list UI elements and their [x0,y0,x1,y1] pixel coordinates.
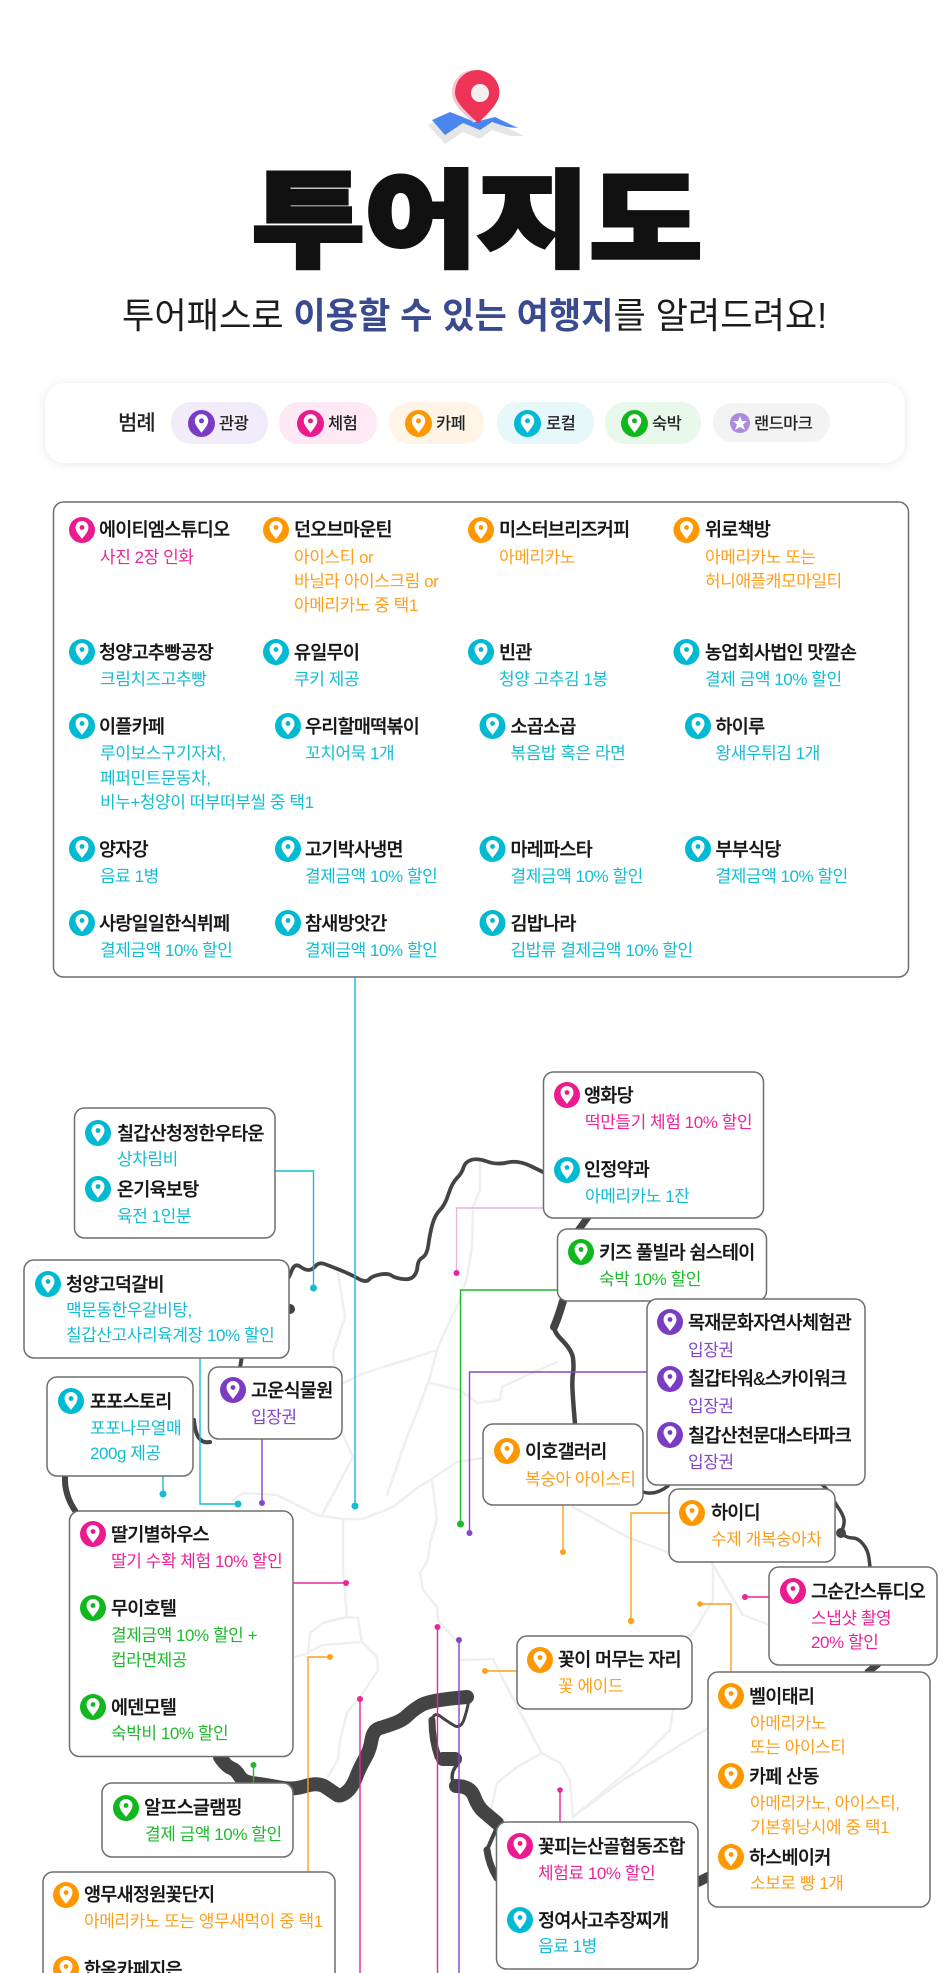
card: 벨이태리, 카페 산동, 하스베이커: 또는 아이스티 [750,1738,845,1757]
connector: 하단 체험 1 [357,1696,363,1973]
card: 칠갑산청정한우타운, 온기육보탕 [74,1108,275,1238]
card: 딸기별하우스, 무이호텔, 에덴모텔: 딸기 수확 체험 10% 할인 [111,1552,282,1571]
connector: 그순간스튜디오 [742,1594,769,1600]
card: 벨이태리, 카페 산동, 하스베이커: 카페 산동 [749,1766,819,1787]
item: 유일무이 [263,639,359,689]
connector: 벨이태리 [697,1601,731,1672]
item: 우리할매떡볶이 [275,713,419,763]
item: 소곱소곱: 볶음밥 혹은 라면 [510,744,625,763]
card: 꽃이 머무는 자리 [517,1636,692,1709]
connector: 꽃이 머무는 자리 [482,1668,517,1674]
item: 위로책방: 아메리카노 또는 [705,548,816,567]
card: 포포스토리 [47,1377,193,1476]
legend: 체험: 체험 [328,414,357,433]
connector: 이호갤러리 [560,1505,566,1555]
item: 빈관 [468,639,608,689]
card: 고운식물원: 고운식물원 [251,1380,333,1401]
item: 던오브마운틴: 아이스티 or [294,548,374,567]
item: 사랑일일한식뷔페: 결제금액 10% 할인 [100,941,232,960]
card: 벨이태리, 카페 산동, 하스베이커 [708,1672,930,1907]
item: 청양고추빵공장: 크림치즈고추빵 [100,670,207,689]
card: 칠갑산청정한우타운, 온기육보탕: 칠갑산청정한우타운 [117,1123,264,1144]
connector: 하단 관광 [456,1637,462,1973]
connector: 꽃피는산골 [557,1787,563,1822]
card: 딸기별하우스, 무이호텔, 에덴모텔: 컵라면제공 [111,1651,187,1670]
legend heading: 범례 [118,412,155,435]
item: 부부식당: 결제금액 10% 할인 [716,867,848,886]
item: 농업회사법인 맛깔손: 농업회사법인 맛깔손 [705,642,857,663]
item: 김밥나라: 김밥류 결제금액 10% 할인 [510,941,693,960]
card: 목재문화자연사체험관, 칠갑타워&스카이워크, 칠갑산천문대스타파크: 목재문화자연사체험관 [688,1312,852,1333]
card: 벨이태리, 카페 산동, 하스베이커: 기본휘낭시에 중 택1 [750,1818,889,1837]
legend: 관광 [171,402,268,444]
item: 위로책방 [674,517,842,591]
card: 키즈 풀빌라 쉼스테이: 키즈 풀빌라 쉼스테이 [599,1242,755,1263]
item: 소곱소곱: 소곱소곱 [510,716,576,737]
item: 우리할매떡볶이: 우리할매떡볶이 [305,716,419,737]
icon: map pin logo [428,70,524,144]
card: 알프스글램핑: 결제 금액 10% 할인 [145,1825,282,1844]
item: 농업회사법인 맛깔손 [674,639,857,689]
item: 미스터브리즈커피 [468,517,629,567]
item: 김밥나라 [480,910,693,960]
item: 마레파스타: 결제금액 10% 할인 [510,867,643,886]
card: 벨이태리, 카페 산동, 하스베이커: 벨이태리 [749,1686,814,1707]
legend: 관광: 관광 [219,414,249,433]
card: 꽃피는산골협동조합, 정여사고추장찌개: 꽃피는산골협동조합 [538,1836,685,1857]
legend: 카페 [389,402,484,444]
item: 미스터브리즈커피: 아메리카노 [499,548,575,567]
connector: 딸기별하우스 [293,1580,349,1586]
title: 투어지도 [252,164,702,281]
connector: 고운식물원 [259,1439,265,1506]
card: 앵화당, 인정약과 [544,1072,764,1218]
item: 하이루: 왕새우튀김 1개 [716,744,820,763]
card: 키즈 풀빌라 쉼스테이: 숙박 10% 할인 [599,1270,701,1289]
item: 마레파스타: 마레파스타 [510,839,593,860]
card: 꽃피는산골협동조합, 정여사고추장찌개 [496,1822,698,1969]
card: 꽃피는산골협동조합, 정여사고추장찌개: 체험료 10% 할인 [538,1864,655,1883]
item: 부부식당 [685,836,848,886]
connector: 투어 목록 [352,977,358,1510]
card: 하이디: 하이디 [711,1502,760,1523]
connector: 알프스글램핑 [250,1762,256,1783]
card: 앵화당, 인정약과: 인정약과 [584,1159,650,1180]
card: 딸기별하우스, 무이호텔, 에덴모텔 [70,1511,293,1756]
card: 알프스글램핑 [102,1783,293,1857]
card: 딸기별하우스, 무이호텔, 에덴모텔: 무이호텔 [111,1598,176,1619]
card: 포포스토리: 포포나무열매 [90,1419,181,1438]
card: 청양고덕갈비: 맥문동한우갈비탕, [66,1301,192,1320]
connector: 청양고덕갈비 [200,1358,242,1508]
item: 에이티엠스튜디오: 에이티엠스튜디오 [99,519,230,540]
card: 키즈 풀빌라 쉼스테이 [558,1229,766,1301]
item: 고기박사냉면 [275,836,437,886]
card: 이호갤러리 [483,1424,643,1505]
item: 고기박사냉면: 고기박사냉면 [305,839,403,860]
item: 하이루 [685,713,820,763]
item: 참새방앗간: 참새방앗간 [305,913,387,934]
card: 그순간스튜디오 [769,1567,937,1665]
card: 딸기별하우스, 무이호텔, 에덴모텔: 딸기별하우스 [111,1524,210,1545]
item: 에이티엠스튜디오 [69,517,230,567]
item: 이플카페 [69,713,314,812]
item: 청양고추빵공장 [69,639,214,689]
card: 벨이태리, 카페 산동, 하스베이커: 아메리카노, 아이스티, [750,1794,900,1813]
map: major roads [65,1159,878,1882]
card: 하이디: 수제 개복숭아차 [711,1530,822,1549]
card: 꽃이 머무는 자리: 꽃이 머무는 자리 [558,1649,681,1670]
card: 이호갤러리: 복숭아 아이스티 [525,1470,636,1489]
item: 참새방앗간 [275,910,437,960]
card: 목재문화자연사체험관, 칠갑타워&스카이워크, 칠갑산천문대스타파크: 입장권 [688,1341,734,1360]
connector: 칠갑산 [275,1171,317,1292]
item: 이플카페: 비누+청양이 떠부떠부씰 중 택1 [100,793,314,812]
card: 앵화당, 인정약과: 떡만들기 체험 10% 할인 [585,1113,752,1132]
card: 포포스토리: 200g 제공 [90,1444,161,1463]
legend: 로컬: 로컬 [546,414,575,433]
item: 이플카페: 이플카페 [99,716,164,737]
connector: 포포스토리 [160,1476,166,1498]
item: 김밥나라: 김밥나라 [510,913,576,934]
item: 마레파스타 [480,836,643,886]
item: 유일무이: 유일무이 [294,642,359,663]
card: 청양고덕갈비 [24,1260,289,1358]
card: 칠갑산청정한우타운, 온기육보탕: 육전 1인분 [117,1207,191,1226]
card: 딸기별하우스, 무이호텔, 에덴모텔: 에덴모텔 [111,1697,176,1718]
item: 위로책방: 위로책방 [705,519,771,540]
item: 사랑일일한식뷔페 [69,910,232,960]
card: 청양고덕갈비: 칠갑산고사리육계장 10% 할인 [66,1326,274,1345]
item: 양자강: 음료 1병 [100,867,159,886]
connector: 하단 체험 2 [434,1624,440,1973]
card: 꽃피는산골협동조합, 정여사고추장찌개: 정여사고추장찌개 [538,1910,668,1931]
item: 부부식당: 부부식당 [716,839,781,860]
card: 벨이태리, 카페 산동, 하스베이커: 소보로 빵 1개 [750,1874,844,1893]
item: 우리할매떡볶이: 꼬치어묵 1개 [305,744,394,763]
legend: 숙박 [605,402,701,444]
connector: 키즈 풀빌라 [457,1290,558,1528]
card: 앵화당, 인정약과: 아메리카노 1잔 [585,1187,690,1206]
card: 목재문화자연사체험관, 칠갑타워&스카이워크, 칠갑산천문대스타파크: 입장권 [688,1397,734,1416]
card: 칠갑산청정한우타운, 온기육보탕: 온기육보탕 [117,1179,199,1200]
item: 사랑일일한식뷔페: 사랑일일한식뷔페 [99,913,229,934]
connector: 앵무새정원 [308,1654,333,1872]
card: 딸기별하우스, 무이호텔, 에덴모텔: 결제금액 10% 할인 + [111,1626,258,1645]
legend: 카페: 카페 [436,414,465,433]
card: 고운식물원 [208,1367,342,1439]
item: 이플카페: 루이보스구기자차, [100,744,226,763]
item: 던오브마운틴: 아메리카노 중 택1 [294,596,418,615]
item: 하이루: 하이루 [716,716,765,737]
item: 이플카페: 페퍼민트문동차, [100,769,211,788]
item: 유일무이: 쿠키 제공 [294,670,359,689]
item: 양자강: 양자강 [99,839,149,860]
item: 청양고추빵공장: 청양고추빵공장 [99,642,214,663]
legend: 체험 [279,402,377,444]
card: 그순간스튜디오: 스냅샷 촬영 [811,1609,891,1628]
card: 칠갑산청정한우타운, 온기육보탕: 상차림비 [117,1150,178,1169]
legend: 로컬 [497,402,594,444]
legend: 랜드마크: 랜드마크 [754,414,813,433]
item: 소곱소곱 [480,713,625,763]
legend: 숙박: 숙박 [652,414,682,433]
card: 목재문화자연사체험관, 칠갑타워&스카이워크, 칠갑산천문대스타파크: 칠갑산천문대스타파크 [688,1425,852,1446]
item: 던오브마운틴: 던오브마운틴 [294,519,392,540]
connector: 앵화당 [454,1208,544,1276]
item: 참새방앗간: 결제금액 10% 할인 [305,941,437,960]
card: 앵무새정원꽃단지, 한옥카페지은: 아메리카노 또는 앵무새먹이 중 택1 [84,1912,323,1931]
card: 딸기별하우스, 무이호텔, 에덴모텔: 숙박비 10% 할인 [111,1724,228,1743]
item: 고기박사냉면: 결제금액 10% 할인 [305,867,437,886]
item: 양자강 [69,836,159,886]
item: 던오브마운틴: 바닐라 아이스크림 or [294,572,439,591]
item: 위로책방: 허니애플캐모마일티 [705,572,842,591]
card: 목재문화자연사체험관, 칠갑타워&스카이워크, 칠갑산천문대스타파크: 칠갑타워&스카이워크 [688,1368,847,1389]
card: 그순간스튜디오: 20% 할인 [811,1633,878,1652]
card: 하이디 [669,1489,835,1562]
legend: 랜드마크 [713,403,830,442]
card: 알프스글램핑: 알프스글램핑 [144,1797,242,1818]
card: 앵무새정원꽃단지, 한옥카페지은: 앵무새정원꽃단지 [84,1884,214,1905]
card: 앵화당, 인정약과: 앵화당 [584,1085,634,1106]
map: minor roads [233,1163,770,1817]
connector: 하이디 [628,1513,669,1624]
subtitle: 투어패스로 이용할 수 있는 여행지를 알려드려요! [122,295,827,336]
card: 꽃이 머무는 자리: 꽃 에이드 [558,1677,623,1696]
panel: legend [45,383,905,463]
card: 그순간스튜디오: 그순간스튜디오 [811,1581,926,1602]
item: 빈관: 청양 고추김 1봉 [499,670,608,689]
connector: 목재문화 [466,1372,648,1536]
panel: tour list [54,502,908,977]
item: 빈관: 빈관 [499,642,532,663]
card: 이호갤러리: 이호갤러리 [525,1441,607,1462]
card: 포포스토리: 포포스토리 [90,1391,172,1412]
card: 목재문화자연사체험관, 칠갑타워&스카이워크, 칠갑산천문대스타파크: 입장권 [688,1453,734,1472]
card: 청양고덕갈비: 청양고덕갈비 [66,1274,164,1295]
item: 농업회사법인 맛깔손: 결제 금액 10% 할인 [705,670,842,689]
card: 꽃피는산골협동조합, 정여사고추장찌개: 음료 1병 [538,1937,597,1956]
card: 벨이태리, 카페 산동, 하스베이커: 아메리카노 [750,1714,826,1733]
item: 에이티엠스튜디오: 사진 2장 인화 [100,548,194,567]
card: 목재문화자연사체험관, 칠갑타워&스카이워크, 칠갑산천문대스타파크 [647,1299,865,1485]
item: 던오브마운틴 [263,517,439,615]
card: 고운식물원: 입장권 [251,1408,297,1427]
item: 미스터브리즈커피: 미스터브리즈커피 [499,519,629,540]
card: 벨이태리, 카페 산동, 하스베이커: 하스베이커 [749,1847,831,1868]
card: 앵무새정원꽃단지, 한옥카페지은 [43,1872,335,1973]
